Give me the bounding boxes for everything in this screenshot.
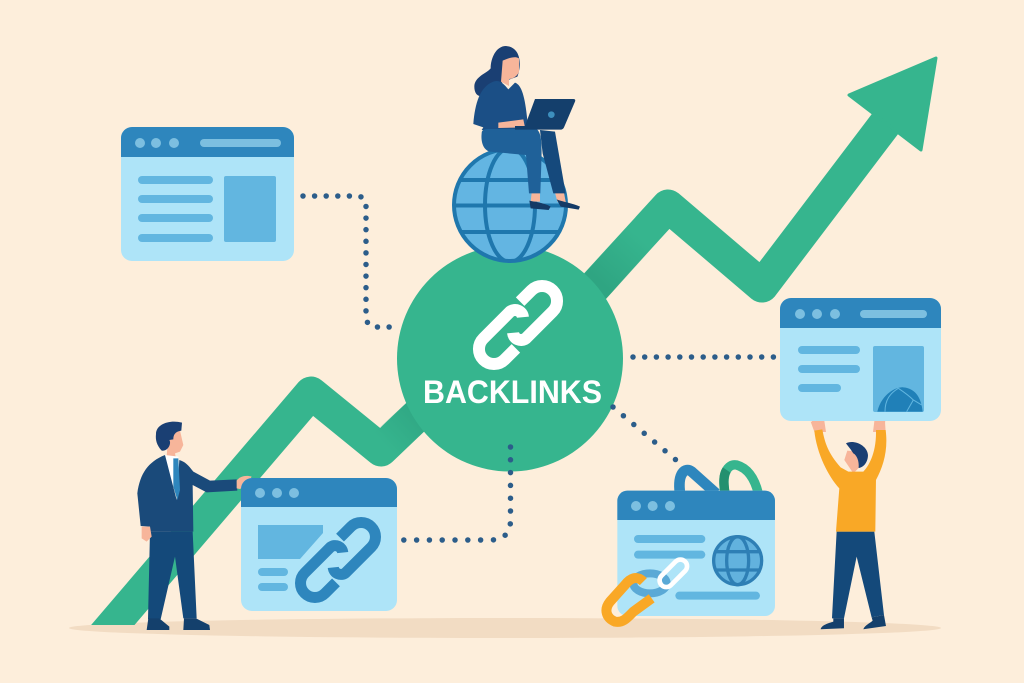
- person: woman with laptop: [473, 46, 580, 210]
- dotted connector: diagonal: [613, 407, 676, 460]
- icon: three-colour chain: [606, 557, 690, 622]
- icon: chain link: [473, 280, 563, 370]
- dotted connector: top-left window: [303, 196, 394, 327]
- panel: bottom-left browser window: [241, 478, 397, 611]
- panel: top-left browser window: [121, 127, 294, 261]
- dotted connector: right window: [633, 354, 774, 360]
- growth arrow: [100, 58, 936, 640]
- icon: chain link: [295, 517, 381, 603]
- globe: [450, 148, 570, 262]
- panel: right browser window: [780, 298, 941, 432]
- icon: globe dome: [877, 387, 923, 412]
- icon: globe: [714, 537, 762, 585]
- dotted connector: bottom window: [403, 447, 510, 540]
- central circle: [397, 246, 623, 472]
- icon: blue and green links behind window: [679, 465, 758, 493]
- ground shadow: [69, 618, 941, 638]
- person: man in yellow sweater: [811, 422, 886, 629]
- label: backlinks: BACKLINKS: [423, 374, 602, 410]
- panel: bottom-right browser window with links: [606, 465, 775, 622]
- person: man in suit: [137, 422, 252, 630]
